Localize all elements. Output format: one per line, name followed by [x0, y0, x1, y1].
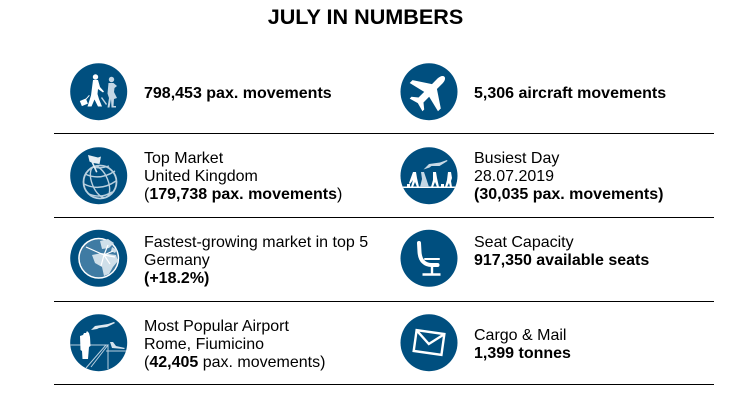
text: busiest day: Busiest Day [474, 150, 559, 167]
icon: aircraft [400, 63, 458, 120]
text: most popular airport: (42,405 pax. movements) [144, 354, 325, 371]
text: seat capacity [474, 234, 649, 269]
icon: seat [400, 230, 458, 287]
icon: globe with flag [70, 147, 127, 204]
title: JULY IN NUMBERS [268, 4, 463, 29]
text: most popular airport: Most Popular Airport [144, 318, 290, 335]
text: top market: (179,738 pax. movements) [144, 186, 342, 203]
text: most popular airport [144, 318, 325, 371]
text: top market: United Kingdom [144, 168, 258, 185]
text: top market [144, 150, 342, 203]
text: cargo and mail: 1,399 tonnes [474, 345, 571, 362]
text: busiest day: (30,035 pax. movements) [474, 186, 663, 203]
icon: globe showing Europe [70, 230, 127, 287]
text: cargo and mail: Cargo & Mail [474, 327, 566, 344]
text: seat capacity: Seat Capacity [474, 234, 574, 251]
icon: busiest day silhouettes and aircraft [400, 147, 458, 204]
text: fastest-growing market [144, 234, 368, 287]
text: busiest day: 28.07.2019 [474, 168, 554, 185]
text: fastest-growing market: Germany [144, 252, 210, 269]
icon: airport viewing terrace [70, 314, 130, 371]
icon: passengers walking with luggage [70, 63, 127, 120]
text: passenger movements: 798,453 pax. movements [144, 85, 332, 102]
text: fastest-growing market: (+18.2%) [144, 270, 209, 287]
text: cargo and mail [474, 327, 571, 362]
text: most popular airport: Rome, Fiumicino [144, 336, 264, 353]
text: busiest day [474, 150, 663, 203]
text: aircraft movements: 5,306 aircraft movements [474, 85, 666, 102]
text: top market: Top Market [144, 150, 224, 167]
text: seat capacity: 917,350 available seats [474, 252, 649, 269]
icon: envelope [400, 314, 458, 371]
text: fastest-growing market: Fastest-growing market in top 5 [144, 234, 368, 251]
